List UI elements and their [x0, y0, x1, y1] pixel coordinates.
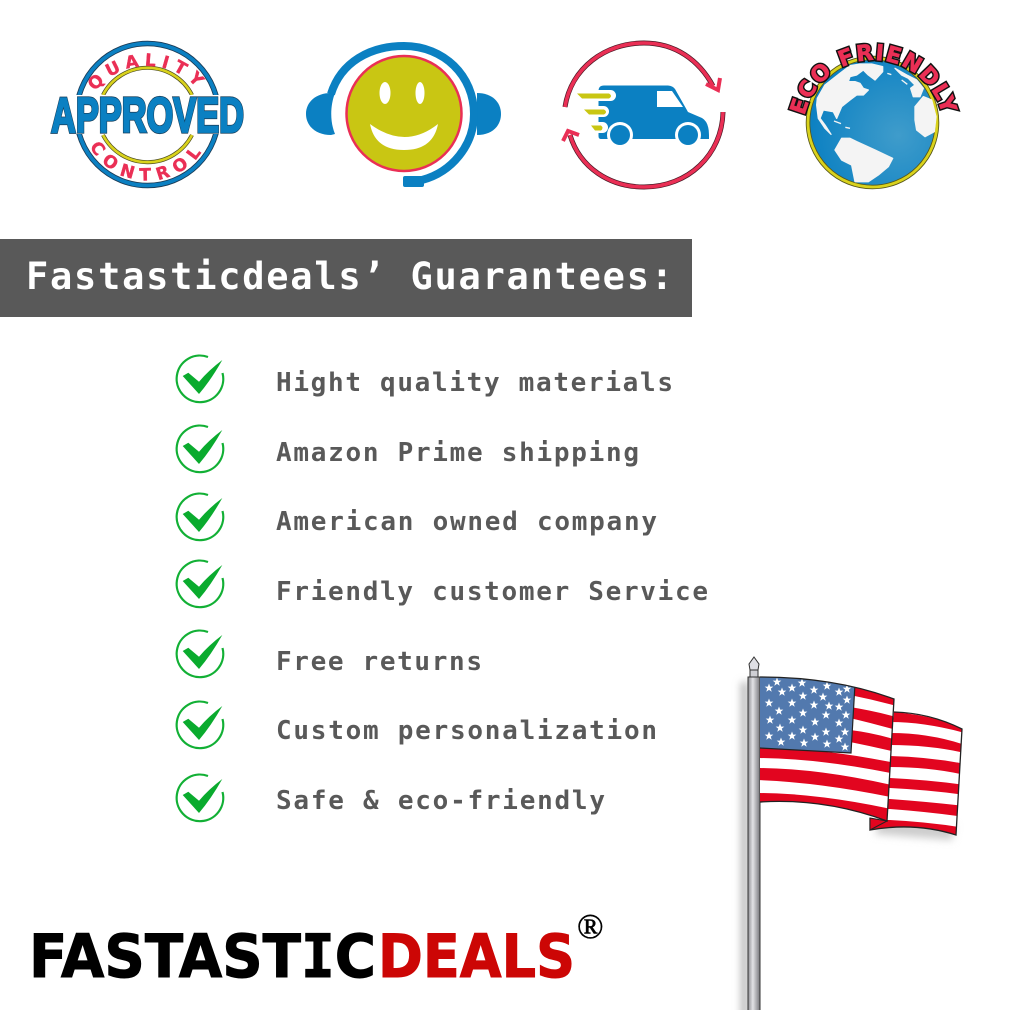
brand logo: [29, 907, 604, 992]
item: friendly customer service: [177, 561, 708, 607]
icon: eco friendly globe: ECO FRIENDLY: [789, 44, 958, 114]
heading banner: [0, 239, 692, 317]
icon: eco friendly globe: ECO FRIENDLY: [787, 42, 960, 116]
icon: delivery van with return arrows: [563, 43, 723, 187]
item: safe and eco-friendly: [177, 775, 605, 821]
icon: eco friendly globe: [787, 42, 960, 190]
brand logo: FASTASTIC: [29, 922, 376, 992]
item: american owned company: American owned company: [276, 507, 657, 537]
icon: american flag on pole: [741, 657, 970, 1010]
item: high quality materials: Hight quality materials: [276, 368, 673, 398]
icon: quality approved badge: APPROVED: [51, 89, 244, 143]
icon: quality approved badge: QUALITY: [88, 53, 206, 89]
item: high quality materials: [177, 356, 673, 402]
heading banner: Fastasticdeals’ Guarantees:: [26, 255, 673, 298]
icon: quality approved badge: APPROVED: [51, 89, 244, 143]
item: safe and eco-friendly: Safe & eco-friendly: [276, 786, 605, 816]
item: american owned company: [177, 494, 657, 540]
checklist: [177, 356, 708, 821]
brand logo: DEALS: [378, 922, 575, 992]
item: amazon prime shipping: [177, 426, 639, 472]
item: amazon prime shipping: Amazon Prime shipping: [276, 438, 639, 468]
item: free returns: [177, 631, 482, 677]
icon: quality approved badge: CONTROL: [92, 142, 202, 181]
item: free returns: Free returns: [276, 647, 482, 677]
item: custom personalization: [177, 702, 657, 748]
icon: smiley with headset: [306, 46, 501, 187]
item: custom personalization: Custom personalization: [276, 716, 657, 746]
icon: quality approved badge: [50, 40, 244, 188]
item: friendly customer service: Friendly customer Service: [276, 577, 708, 607]
brand logo: ®: [577, 907, 604, 946]
